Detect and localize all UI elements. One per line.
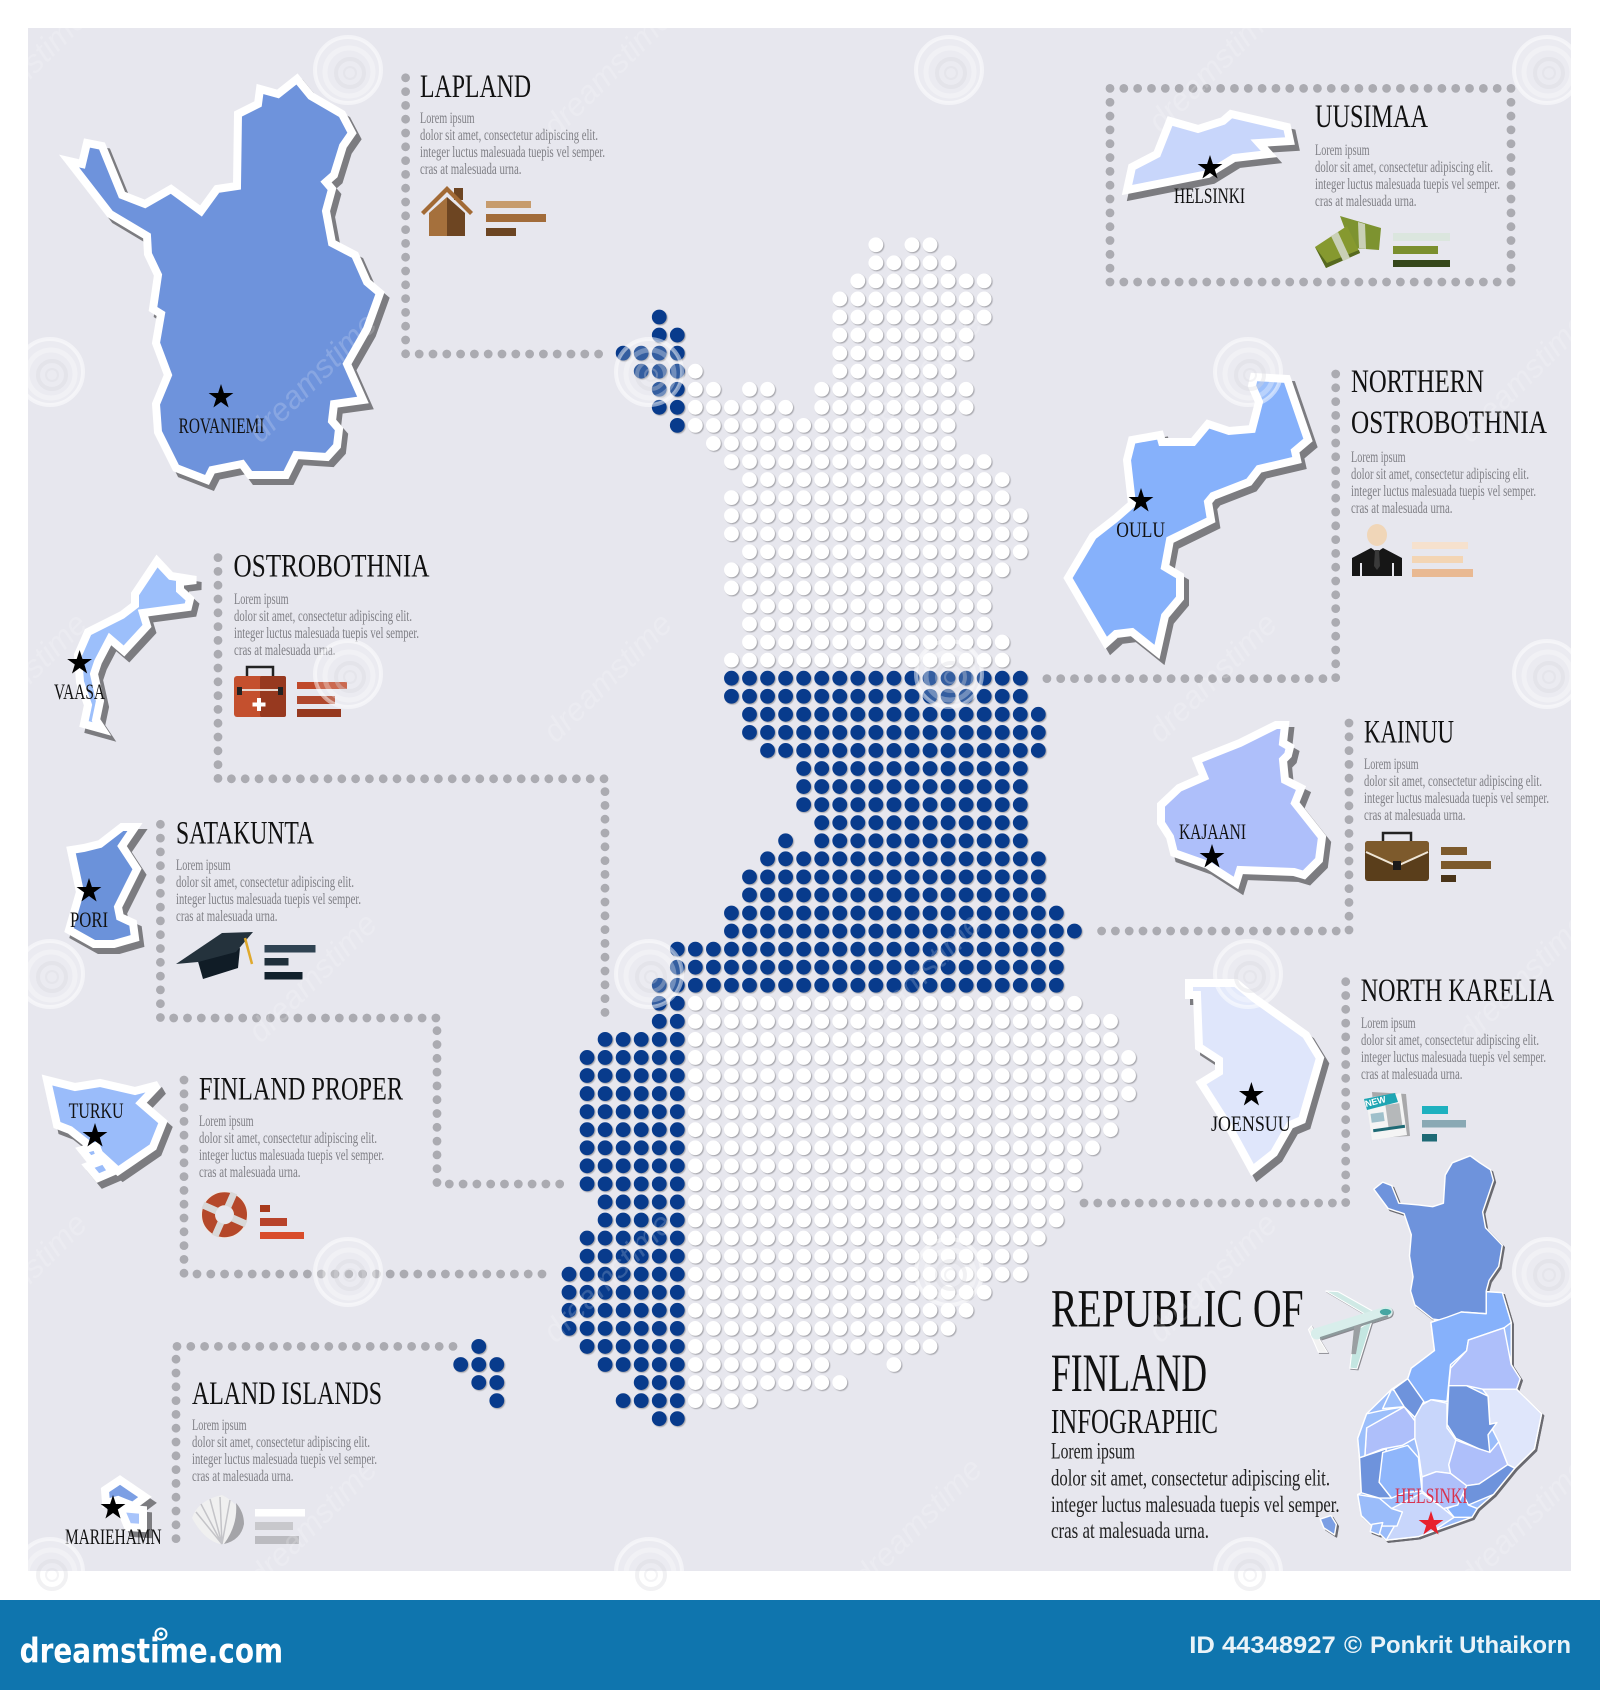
map: North Karelia <box>1189 983 1320 1170</box>
panel: Finland Proper <box>47 1072 403 1239</box>
body text: Lorem ipsum <box>192 1417 247 1434</box>
intro text: cras at malesuada urna. <box>1051 1518 1209 1543</box>
body text <box>199 1113 384 1181</box>
body text: cras at malesuada urna. <box>199 1164 300 1181</box>
image credit: © <box>1344 1632 1362 1659</box>
panel: Satakunta <box>69 816 361 980</box>
white dots: rest of Finland <box>695 245 1129 1401</box>
capital: Turku: TURKU <box>69 1098 124 1123</box>
stock watermark layer: dreamstime <box>535 0 679 144</box>
body text: Lorem ipsum <box>199 1113 254 1130</box>
footer banner <box>0 1600 1600 1690</box>
image credit: Ponkrit Uthaikorn <box>1370 1632 1571 1659</box>
body text: dolor sit amet, consectetur adipiscing elit. <box>1315 159 1493 176</box>
panel: North Karelia <box>1189 973 1554 1170</box>
capital: Vaasa: VAASA <box>54 679 105 704</box>
icon: newspaper <box>1364 1092 1410 1140</box>
capital: Pori: PORI <box>70 907 108 932</box>
map: Aland Islands <box>105 1480 145 1528</box>
bars <box>1412 542 1473 577</box>
map: Lapland <box>69 79 380 480</box>
heading: LAPLAND <box>420 69 531 105</box>
stock watermark layer: dreamstime <box>535 605 679 749</box>
icon: briefcase <box>1365 833 1429 881</box>
body text <box>176 857 361 925</box>
body text: integer luctus malesuada tuepis vel semper. <box>420 144 605 161</box>
icon: newspaper: NEW <box>1364 1094 1387 1109</box>
capital: Kajaani: KAJAANI <box>1179 819 1246 844</box>
icon: airplane <box>1308 1291 1391 1369</box>
panel: Republic of Finland title <box>1051 1279 1391 1543</box>
small regional map of Finland <box>1320 1156 1542 1540</box>
panel: Uusimaa <box>1127 99 1500 268</box>
stock watermark layer: dreamstime <box>845 905 989 1049</box>
body text <box>234 591 419 659</box>
label: Helsinki capital <box>1395 1483 1468 1534</box>
body text: dolor sit amet, consectetur adipiscing elit. <box>176 874 354 891</box>
main title: FINLAND <box>1051 1343 1207 1403</box>
heading: UUSIMAA <box>1315 99 1428 135</box>
stock watermark layer: dreamstime <box>535 1205 679 1349</box>
body text: integer luctus malesuada tuepis vel semper. <box>176 891 361 908</box>
body text: cras at malesuada urna. <box>420 161 522 178</box>
body text: dolor sit amet, consectetur adipiscing elit. <box>192 1434 370 1451</box>
icon: first aid kit <box>234 667 286 717</box>
bars <box>260 1205 304 1239</box>
main title <box>1051 1279 1304 1403</box>
body text: cras at malesuada urna. <box>1361 1066 1462 1083</box>
body text <box>1315 142 1500 210</box>
map: Northern Ostrobothnia <box>1068 377 1308 652</box>
capital: Oulu: OULU <box>1116 517 1165 542</box>
stock watermark layer: dreamstime <box>240 905 384 1049</box>
icon: graduation cap <box>176 932 253 979</box>
bars <box>1393 233 1450 267</box>
stock watermark layer: dreamstime <box>1450 905 1594 1049</box>
icon: shell <box>192 1495 244 1544</box>
image credit: ID 44348927 <box>1189 1632 1336 1659</box>
capital: Turku <box>69 1098 124 1146</box>
body text: cras at malesuada urna. <box>176 908 278 925</box>
map: Satakunta <box>69 827 137 944</box>
bars <box>255 1509 305 1544</box>
icon: house <box>421 186 473 236</box>
bars <box>1441 847 1491 882</box>
stock watermark layer: dreamstime <box>1140 1205 1284 1349</box>
body text: Lorem ipsum <box>1315 142 1370 159</box>
capital: Oulu <box>1116 488 1165 542</box>
icon: lifebuoy <box>201 1191 248 1238</box>
body text: dolor sit amet, consectetur adipiscing elit. <box>420 127 598 144</box>
body text: Lorem ipsum <box>176 857 231 874</box>
intro text: integer luctus malesuada tuepis vel semper. <box>1051 1492 1340 1517</box>
body text <box>1361 1015 1546 1083</box>
capital: Rovaniemi <box>179 384 264 438</box>
central dot map of Finland <box>461 245 1129 1419</box>
intro text: dolor sit amet, consectetur adipiscing elit. <box>1051 1466 1330 1491</box>
image credit <box>1189 1632 1571 1659</box>
body text: Lorem ipsum <box>1351 449 1406 466</box>
bars <box>486 201 546 236</box>
intro text <box>1051 1439 1340 1543</box>
map: Uusimaa <box>1127 114 1290 190</box>
panel: Kainuu <box>1161 715 1549 883</box>
body text: Lorem ipsum <box>1364 756 1419 773</box>
stock watermark layer: dreamstime <box>1450 1450 1594 1594</box>
body text: cras at malesuada urna. <box>234 642 336 659</box>
heading: OSTROBOTHNIA <box>1351 405 1547 441</box>
bars <box>297 682 347 717</box>
heading: NORTHERN <box>1351 364 1484 400</box>
body text: Lorem ipsum <box>1361 1015 1416 1032</box>
map: Ostrobothnia <box>78 561 196 729</box>
body text <box>1351 449 1536 517</box>
body text: Lorem ipsum <box>234 591 289 608</box>
capital: Helsinki: HELSINKI <box>1174 183 1245 208</box>
capital: Vaasa <box>54 650 105 704</box>
heading: SATAKUNTA <box>176 816 314 852</box>
body text: cras at malesuada urna. <box>1364 807 1466 824</box>
map: Kainuu <box>1161 725 1322 883</box>
capital: Pori <box>70 878 108 932</box>
map: Finland Proper <box>47 1080 163 1178</box>
icon: money <box>1315 216 1381 268</box>
body text: integer luctus malesuada tuepis vel semper. <box>234 625 419 642</box>
body text: integer luctus malesuada tuepis vel semper. <box>1315 176 1500 193</box>
heading: FINLAND PROPER <box>199 1072 403 1108</box>
body text: dolor sit amet, consectetur adipiscing elit. <box>199 1130 377 1147</box>
stock watermark layer: dreamstime <box>845 305 989 449</box>
body text: integer luctus malesuada tuepis vel semper. <box>199 1147 384 1164</box>
label: Helsinki capital: HELSINKI <box>1395 1483 1468 1508</box>
capital: Helsinki <box>1174 155 1245 208</box>
capital: Rovaniemi: ROVANIEMI <box>179 413 264 438</box>
heading: ALAND ISLANDS <box>192 1376 382 1412</box>
intro text: Lorem ipsum <box>1051 1439 1135 1464</box>
logo: dreamstime.com <box>20 1632 283 1672</box>
blue dots: highlighted regions <box>461 317 1075 1419</box>
heading: KAINUU <box>1364 715 1454 751</box>
body text: cras at malesuada urna. <box>192 1468 294 1485</box>
body text <box>1364 756 1549 824</box>
body text: integer luctus malesuada tuepis vel semper. <box>192 1451 377 1468</box>
stock watermark layer: dreamstime <box>240 305 384 449</box>
stock watermark layer: dreamstime <box>845 1450 989 1594</box>
heading <box>1351 364 1547 441</box>
bars <box>264 945 316 980</box>
stock watermark layer: dreamstime <box>1140 605 1284 749</box>
body text <box>192 1417 377 1485</box>
capital: Mariehamn: MARIEHAMN <box>65 1524 162 1549</box>
stock watermark layer: dreamstime <box>1450 305 1594 449</box>
main title: REPUBLIC OF <box>1051 1279 1304 1339</box>
body text: cras at malesuada urna. <box>1351 500 1452 517</box>
capital: Kajaani <box>1179 819 1246 868</box>
capital: Joensuu: JOENSUU <box>1211 1111 1291 1136</box>
bars <box>1422 1106 1466 1142</box>
capital: Joensuu <box>1211 1082 1291 1136</box>
capital: Mariehamn <box>65 1495 162 1549</box>
panel: Aland Islands <box>65 1376 382 1549</box>
body text <box>420 110 605 178</box>
subtitle: INFOGRAPHIC <box>1051 1402 1218 1441</box>
panel: Lapland <box>69 69 605 480</box>
dotted connector lines <box>160 78 1511 1540</box>
icon: businessman <box>1352 524 1402 576</box>
body text: cras at malesuada urna. <box>1315 193 1416 210</box>
body text: Lorem ipsum <box>420 110 475 127</box>
stock watermark layer: dreamstime <box>240 1450 384 1594</box>
heading: OSTROBOTHNIA <box>234 549 430 585</box>
panel: Northern Ostrobothnia <box>1068 364 1547 652</box>
panel: Ostrobothnia <box>54 549 430 729</box>
body text: dolor sit amet, consectetur adipiscing elit. <box>234 608 412 625</box>
